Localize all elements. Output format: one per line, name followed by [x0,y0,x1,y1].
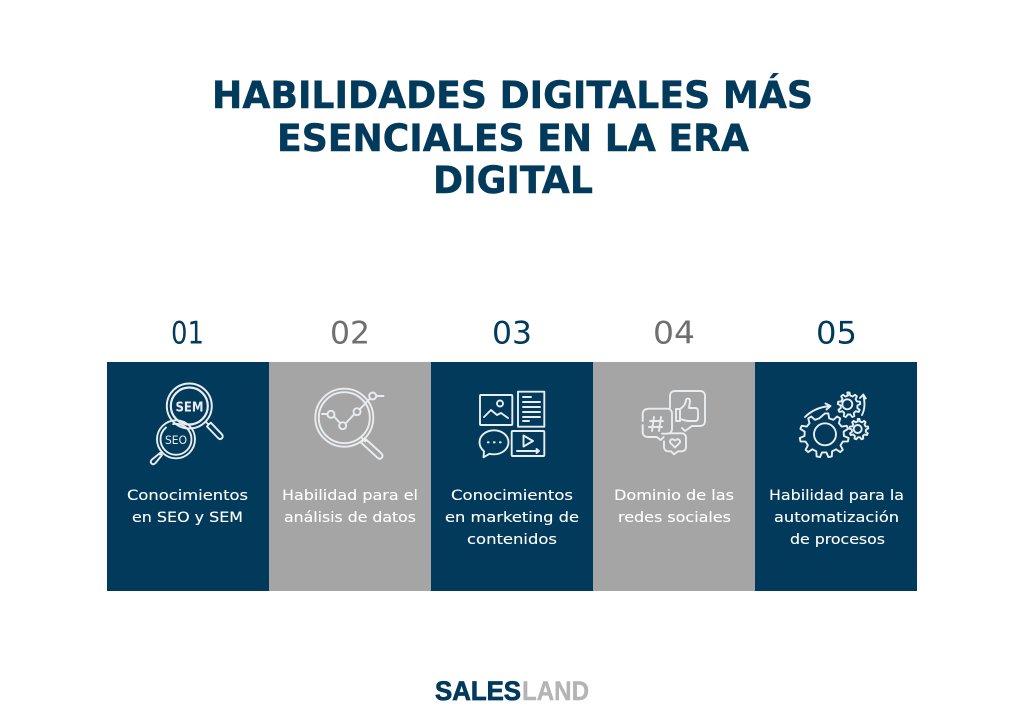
number 04: 04 [653,316,695,352]
text: Dominio de las redes sociales: redes sociales [618,509,731,526]
title [212,73,813,202]
panel: 01 SEO y SEM [107,316,269,591]
title: ESENCIALES EN LA ERA [277,116,749,160]
text: Habilidad para la automatización de procesos: de procesos [790,531,885,548]
text: Conocimientos en SEO y SEM [127,487,248,526]
icon: magnifier with line chart [315,389,384,459]
text: Conocimientos en marketing de contenidos: Conocimientos [451,487,573,504]
title: DIGITAL [433,158,593,202]
panel: 02 análisis de datos [269,316,431,591]
text: Dominio de las redes sociales [614,487,734,526]
title: HABILIDADES DIGITALES MÁS [212,73,813,117]
icon: gears with arrows [800,392,868,457]
icon: content formats [480,392,544,457]
text: Conocimientos en marketing de contenidos [445,487,579,548]
text: Habilidad para la automatización de procesos [769,487,904,548]
icon: SEM and SEO magnifiers [151,384,223,464]
panel: 04 redes sociales [593,316,755,591]
icon: social media bubbles [643,391,705,454]
text: Dominio de las redes sociales: Dominio de las [614,487,734,504]
logo: SalesLand [435,676,589,706]
number 03: 03 [492,316,532,352]
text: Habilidad para la automatización de procesos: Habilidad para la [769,487,904,504]
logo: SalesLand: SALES [435,676,521,706]
text: Conocimientos en marketing de contenidos: contenidos [467,531,557,548]
number 02: 02 [330,316,370,352]
text: Conocimientos en SEO y SEM: Conocimientos [127,487,248,504]
text: Habilidad para el análisis de datos: Habilidad para el [282,487,418,504]
text: Conocimientos en SEO y SEM: en SEO y SEM [132,509,243,526]
logo: SalesLand: LAND [522,676,589,706]
panel: 03 marketing de contenidos [431,316,593,591]
text: Conocimientos en marketing de contenidos: en marketing de [445,509,579,526]
number 05: 05 [816,316,857,352]
icon: SEM and SEO magnifiers: SEO [165,433,187,447]
text: Habilidad para el análisis de datos: análisis de datos [284,509,416,526]
text: Habilidad para la automatización de procesos: automatización [774,509,899,526]
panel: 05 automatización de procesos [755,316,917,591]
number 01: 01 [171,316,204,352]
icon: SEM and SEO magnifiers: SEM [176,400,204,416]
text: Habilidad para el análisis de datos [282,487,418,526]
